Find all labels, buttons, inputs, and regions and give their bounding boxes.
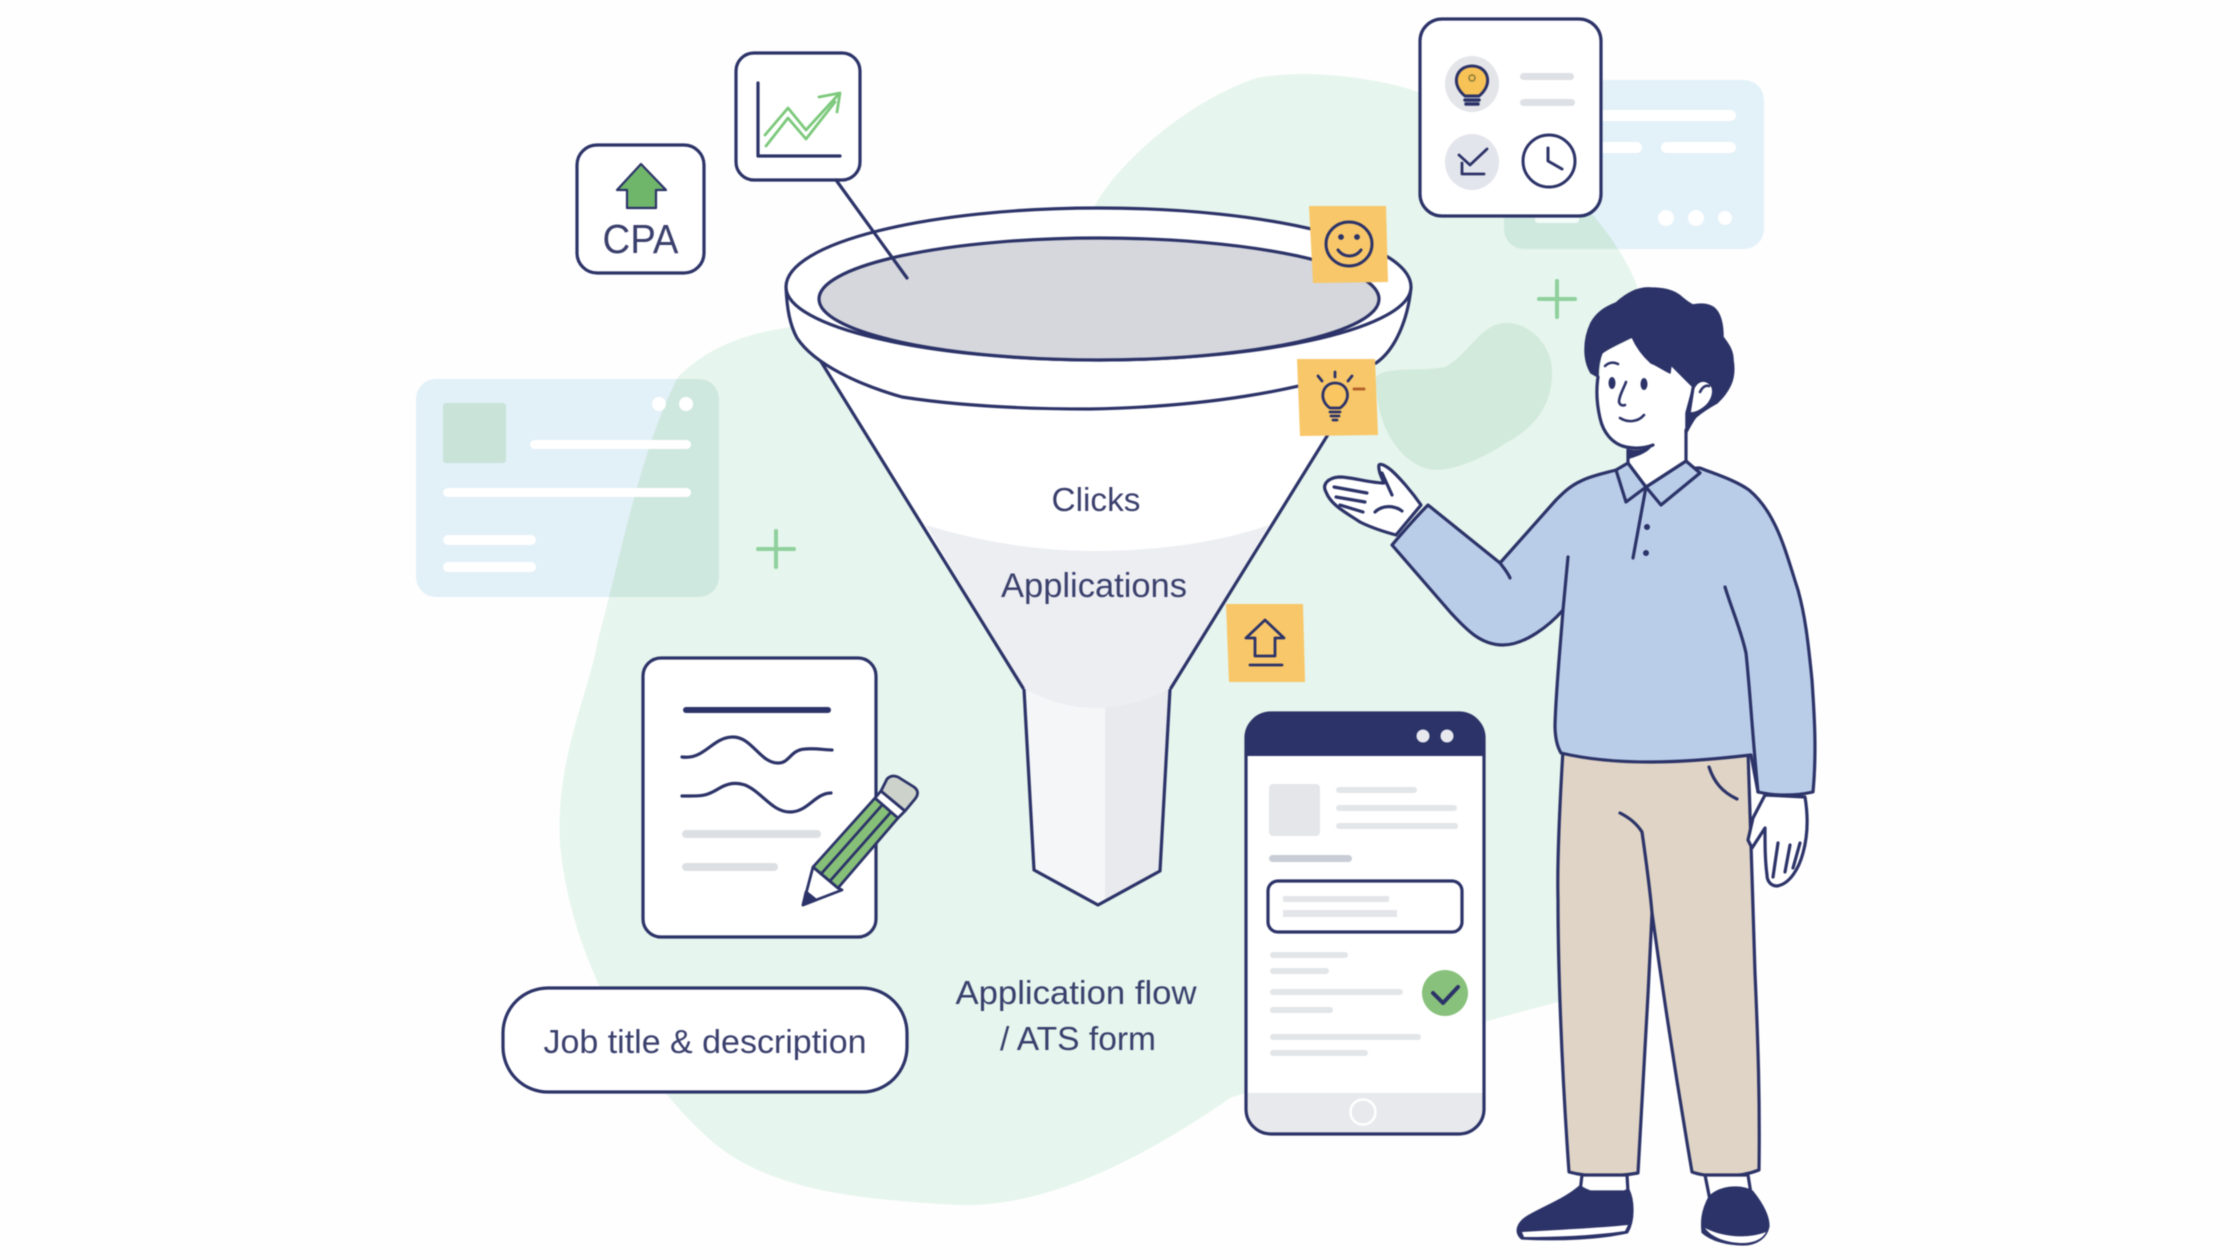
panel: faded card right — [1504, 80, 1764, 249]
left hand (viewer's right) — [1748, 795, 1807, 886]
document heading line — [683, 707, 831, 713]
home button — [1350, 1100, 1376, 1124]
shirt — [1392, 461, 1815, 795]
form text bars — [1270, 952, 1421, 1056]
label: Applications: Applications — [1001, 567, 1187, 605]
shoes — [1518, 1187, 1768, 1244]
sticky note: light bulb — [1297, 359, 1378, 436]
handwriting lines — [682, 737, 832, 812]
decorative blob: darker green — [1376, 323, 1552, 470]
icon: up arrow — [617, 164, 666, 208]
label: Application flow / ATS form: / ATS form — [1000, 1020, 1156, 1057]
hair — [1585, 288, 1734, 434]
document page — [643, 658, 876, 937]
card: icons panel top right — [1420, 19, 1601, 216]
phone header — [1246, 713, 1484, 1134]
funnel rim — [786, 208, 1411, 409]
profile placeholder — [1269, 784, 1458, 836]
grey text bars — [682, 830, 821, 871]
funnel — [786, 208, 1411, 905]
connector line from chart to funnel — [836, 180, 907, 278]
label: Application flow / ATS form — [956, 974, 1197, 1057]
plus sign left — [758, 531, 794, 567]
neck lines — [1628, 430, 1686, 487]
icon: bulb in circle — [1445, 56, 1499, 112]
icon: clock — [1523, 135, 1575, 187]
card: CPA icon — [577, 145, 704, 273]
icon: check chart in circle — [1445, 134, 1499, 190]
socks — [1580, 1175, 1752, 1200]
face and neck fill — [1597, 335, 1695, 487]
form input field — [1268, 881, 1462, 932]
pill: Job title & description — [503, 988, 907, 1092]
card: trend chart — [736, 53, 860, 180]
document with pencil — [643, 658, 918, 937]
collar — [1616, 461, 1700, 505]
pants — [1558, 750, 1759, 1176]
label: Application flow / ATS form: Application flow — [956, 974, 1197, 1011]
label: Clicks: Clicks — [1052, 481, 1140, 518]
neck shadow — [1628, 445, 1653, 459]
ear — [1689, 380, 1714, 414]
face details — [1605, 363, 1709, 421]
icon: pencil — [803, 776, 918, 905]
funnel neck — [1024, 689, 1170, 905]
text placeholder bars — [1520, 73, 1575, 106]
pill: Job title & description: Job title & description — [544, 1023, 866, 1060]
icon: bulb — [1318, 372, 1352, 420]
background blob: pale green — [560, 74, 1655, 1205]
panel: faded card left — [416, 379, 719, 597]
head — [1585, 288, 1734, 487]
sticky note: smiley — [1309, 206, 1388, 283]
person — [1325, 288, 1815, 1244]
jaw line — [1597, 377, 1653, 448]
plus sign right — [1539, 281, 1575, 317]
label: CPA: CPA — [602, 216, 679, 262]
icon: upload arrow — [1246, 620, 1284, 665]
sticky note: upload arrow — [1226, 604, 1305, 682]
funnel cone with clicks and applications bands — [820, 360, 1371, 708]
funnel opening — [819, 238, 1379, 360]
icon: smiley — [1326, 222, 1372, 266]
icon: green check badge — [1422, 970, 1468, 1016]
icon: green trend arrow — [765, 93, 840, 146]
right hand (gesturing) — [1325, 464, 1421, 535]
axes — [758, 83, 840, 156]
buttons — [1643, 524, 1650, 556]
phone mockup — [1246, 713, 1484, 1134]
